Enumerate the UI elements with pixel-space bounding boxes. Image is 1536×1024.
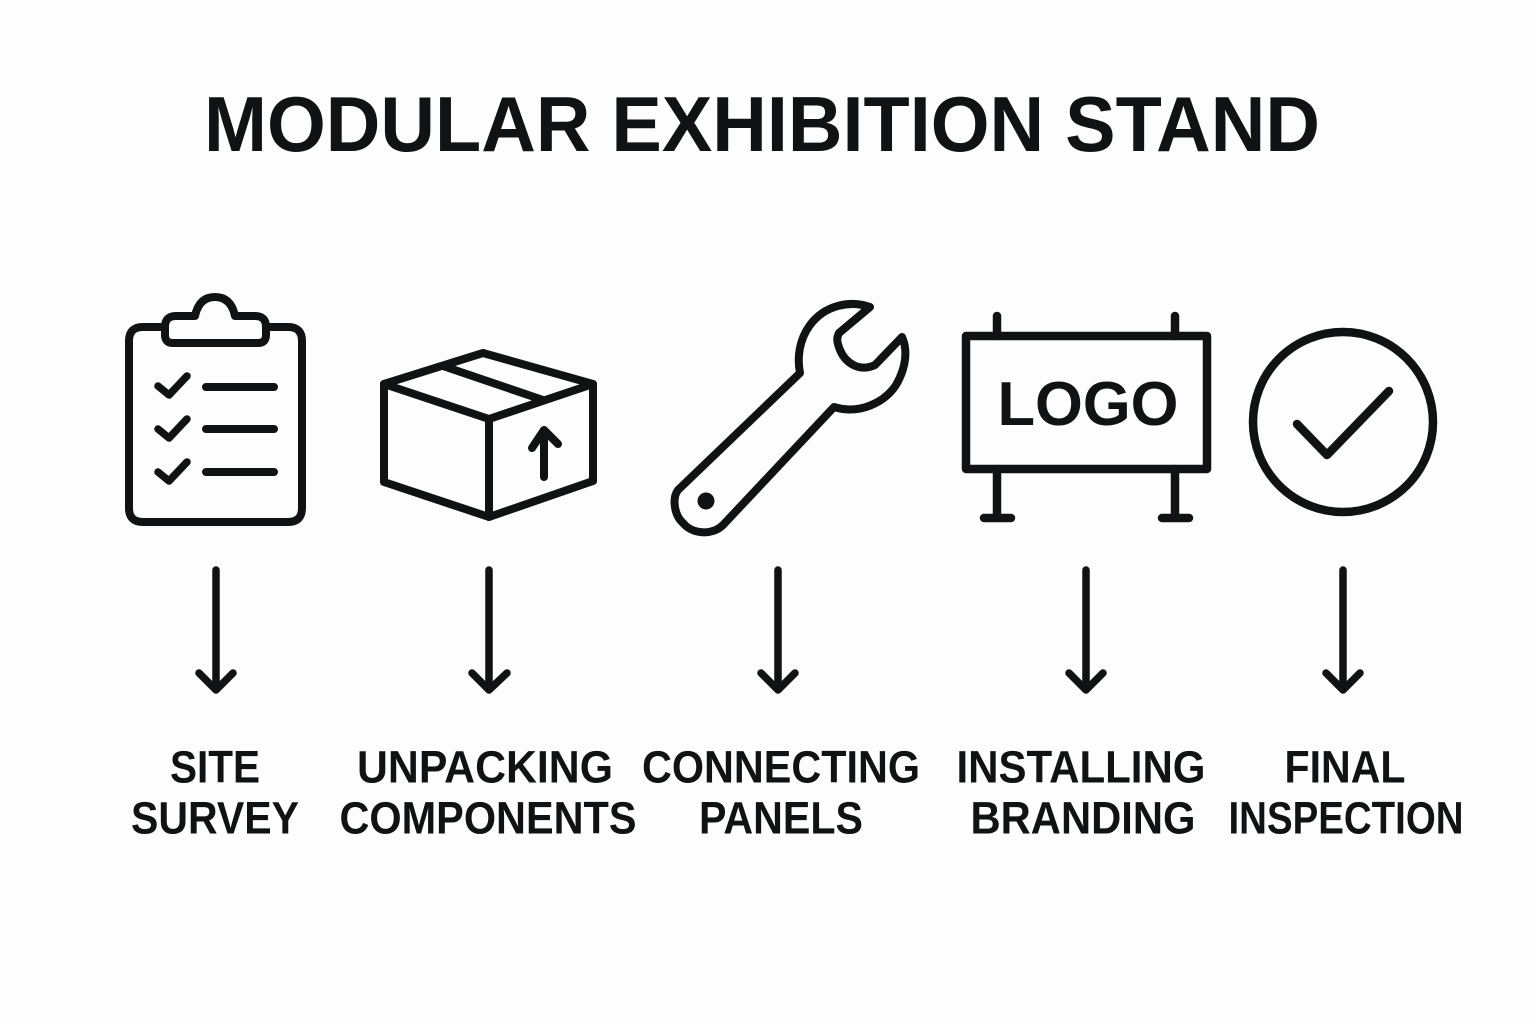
arrow 1 [199,570,233,690]
icon: cardboard box [384,353,593,517]
label: installing branding: INSTALLING [956,742,1206,792]
label: installing branding: BRANDING [970,792,1196,844]
label: site survey: SURVEY [131,792,299,844]
label: final inspection: INSPECTION [1228,792,1464,844]
arrow 2 [472,570,507,690]
arrow 4 [1069,570,1103,690]
label: installing branding [956,742,1206,844]
label: connecting panels: CONNECTING [642,742,920,792]
label: site survey: SITE [170,742,260,792]
label: connecting panels: PANELS [699,792,863,844]
icon: logo banner [966,316,1207,518]
arrow 3 [761,570,795,690]
label: unpacking components: COMPONENTS [340,792,636,844]
label: final inspection [1228,742,1464,844]
label: unpacking components: UNPACKING [357,742,613,792]
label: final inspection: FINAL [1284,742,1406,792]
icon: check circle [1253,332,1433,512]
title: MODULAR EXHIBITION STAND [204,80,1320,168]
logo text: LOGO [998,370,1178,439]
icon: clipboard checklist [129,297,302,522]
label: connecting panels [642,742,920,844]
label: unpacking components [340,742,636,844]
icon: wrench [675,304,905,532]
label: site survey [131,742,299,844]
arrow 5 [1326,570,1360,690]
